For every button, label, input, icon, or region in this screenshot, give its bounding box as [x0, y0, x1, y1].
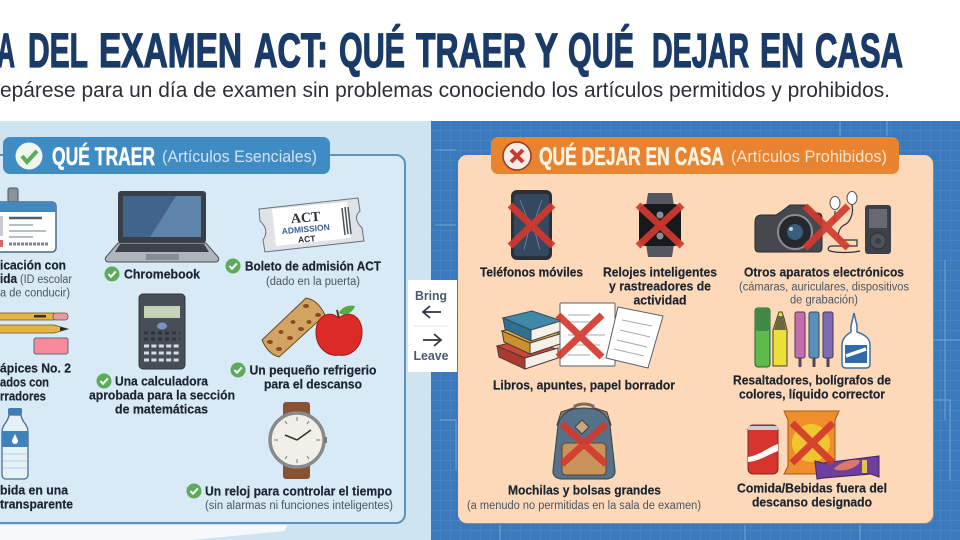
header: qué traer: (Artículos Esenciales)	[162, 148, 317, 166]
item: calculadora: aprobada para la sección	[89, 388, 235, 402]
header: qué dejar en casa	[491, 137, 899, 174]
item: calculadora	[89, 294, 235, 416]
arrow: bring	[423, 306, 441, 318]
title: EXAMEN	[99, 25, 242, 78]
item: comida y bebidas: descanso designado	[752, 496, 872, 510]
item: lápices: ápices No. 2	[0, 362, 71, 376]
item: relojes inteligentes: Relojes inteligentes	[603, 266, 717, 280]
item: otros aparatos electrónicos: de grabación)	[790, 294, 858, 306]
item: chromebook: Chromebook	[124, 268, 200, 282]
item: comida y bebidas: Comida/Bebidas fuera del	[737, 482, 887, 496]
item: boleto ACT: (dado en la puerta)	[266, 276, 360, 288]
title: QUÉ	[568, 24, 634, 78]
item: boleto ACT: ACT	[298, 233, 317, 245]
item: chromebook	[104, 191, 219, 282]
item: boleto ACT: ACT	[290, 210, 322, 227]
item: identificación: (ID escolar	[20, 274, 72, 286]
panel: blue left background	[0, 121, 431, 540]
title: DEL	[28, 25, 88, 78]
item: botella de agua: bida en una	[0, 484, 69, 498]
item: reloj: Un reloj para controlar el tiempo	[205, 484, 392, 498]
item: otros aparatos electrónicos	[739, 192, 909, 306]
header: qué traer: QUÉ TRAER	[52, 142, 155, 171]
title: QUÉ	[339, 24, 405, 78]
header: qué dejar en casa: (Artículos Prohibidos)	[731, 148, 887, 166]
item: boleto ACT: Boleto de admisión ACT	[245, 260, 381, 274]
header: qué dejar en casa: QUÉ DEJAR EN CASA	[539, 142, 724, 171]
item: reloj	[186, 402, 393, 512]
item: reloj: (sin alarmas ni funciones inteligentes)	[205, 500, 393, 512]
bring / leave box: Leave	[414, 349, 449, 363]
item: teléfonos móviles: Teléfonos móviles	[480, 266, 583, 280]
panel: blueprint right background	[431, 121, 960, 540]
item: otros aparatos electrónicos: (cámaras, auriculares, dispositivos	[739, 282, 909, 294]
item: boleto ACT: ADMISSION	[281, 222, 330, 236]
bring / leave box: Bring	[415, 289, 447, 303]
item: lápices: rradores	[0, 390, 46, 404]
item: refrigerio: Un pequeño refrigerio	[250, 364, 377, 378]
title: EN	[760, 25, 804, 78]
item: libros, apuntes: Libros, apuntes, papel borrador	[493, 378, 675, 392]
item: botella de agua	[0, 408, 73, 512]
item: resaltadores, bolígrafos, líquido corrector: colores, líquido corrector	[739, 388, 885, 402]
header: qué traer	[3, 137, 330, 174]
bring / leave box	[408, 280, 457, 372]
item: refrigerio: para el descanso	[264, 378, 362, 392]
item: relojes inteligentes: actividad	[634, 294, 686, 308]
item: identificación: icación con	[0, 258, 66, 272]
item: resaltadores, bolígrafos, líquido corrector: Resaltadores, bolígrafos de	[733, 374, 891, 388]
item: relojes inteligentes	[603, 193, 717, 308]
panel: qué traer	[0, 137, 405, 523]
item: relojes inteligentes: y rastreadores de	[609, 280, 711, 294]
title	[0, 24, 903, 78]
item: calculadora: de matemáticas	[115, 402, 208, 416]
item: identificación	[0, 188, 72, 300]
item: mochilas	[467, 404, 701, 512]
title: CASA	[815, 25, 903, 78]
item: comida y bebidas	[737, 411, 887, 510]
subtitle: epárese para un día de examen sin problemas conociendo los artículos permitidos y prohibidos.	[0, 78, 890, 102]
item: identificación: ida	[0, 272, 18, 286]
title: Y	[535, 25, 558, 78]
title: DEJAR	[652, 25, 749, 78]
arrow: leave	[423, 334, 441, 346]
item: botella de agua: transparente	[0, 498, 73, 512]
panel: qué dejar en casa	[458, 137, 934, 524]
item: mochilas: (a menudo no permitidas en la sala de examen)	[467, 500, 701, 512]
item: lápices	[0, 313, 71, 404]
item: lápices: ados con	[0, 376, 49, 390]
item: boleto ACT	[226, 198, 381, 288]
item: calculadora: Una calculadora	[115, 374, 209, 388]
item: identificación: a de conducir)	[0, 288, 70, 300]
item: resaltadores, bolígrafos, líquido corrector	[733, 308, 891, 402]
title: ACT:	[254, 25, 328, 78]
item: libros, apuntes	[493, 303, 675, 392]
papers at the bottom of left panel	[0, 525, 287, 540]
item: teléfonos móviles	[480, 190, 583, 280]
item: otros aparatos electrónicos: Otros aparatos electrónicos	[744, 266, 904, 280]
item: refrigerio	[230, 298, 377, 392]
title: TRAER	[416, 25, 526, 78]
item: mochilas: Mochilas y bolsas grandes	[508, 484, 661, 498]
